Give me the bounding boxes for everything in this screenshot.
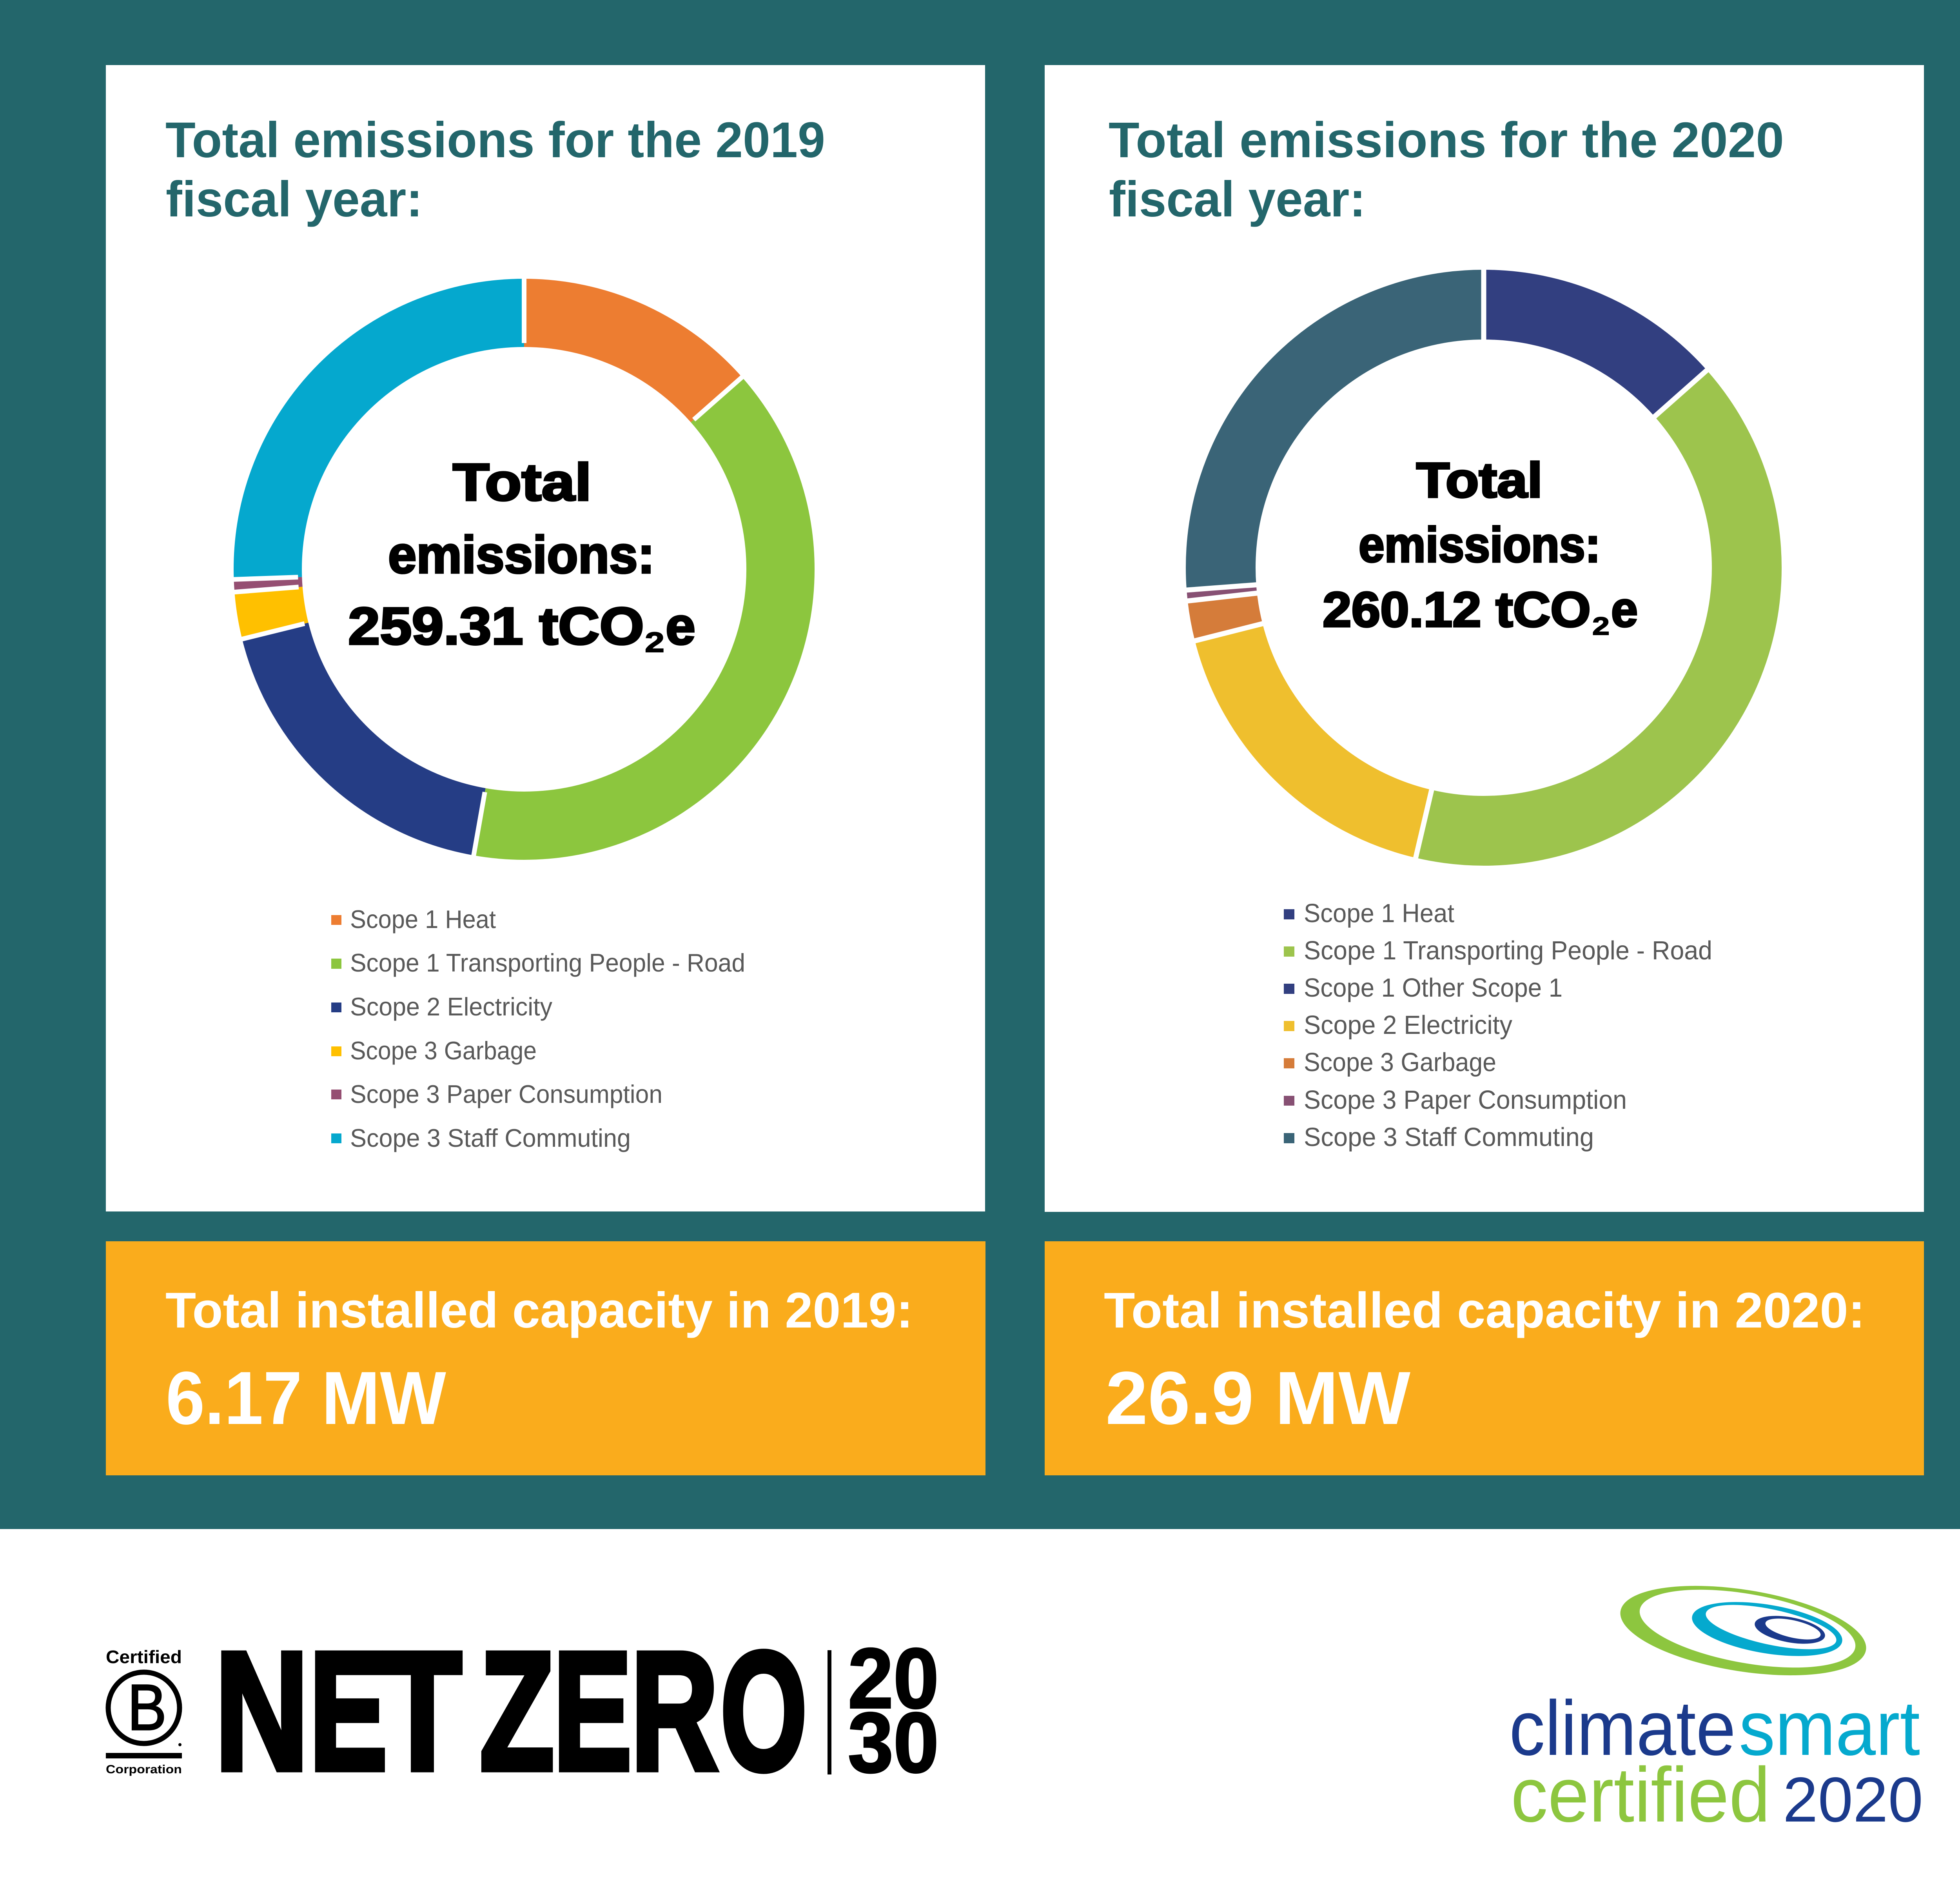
legend: 2019: Scope 3 Paper Consumption: [350, 1080, 662, 1108]
legend: 2020: Scope 2 Electricity: [1304, 1010, 1512, 1040]
heading: 2019 emissions: Total emissions for the 2019: [165, 112, 825, 168]
wordmark: NET ZERO: T: [383, 1617, 462, 1805]
callout: 2020 installed capacity: 26.9 MW: [1105, 1356, 1411, 1440]
legend: 2019: Scope 3 Staff Commuting: [350, 1124, 631, 1152]
logo: climatesmart certified 2020 wordmark: climate: [1509, 1685, 1736, 1771]
donut centre label: 2020 total: emissions:: [1359, 517, 1601, 572]
legend: 2019: Scope 1 Heat: [350, 905, 496, 934]
donut centre label: 2020 total: e: [1611, 582, 1638, 637]
wordmark: NET ZERO: O: [720, 1617, 807, 1805]
panel: 2020 emissions: [1045, 65, 1924, 1212]
legend: 2020: [1284, 899, 1712, 1152]
legend: 2020: Scope 3 Paper Consumption: [1304, 1085, 1627, 1115]
donut centre label: 2019 total: 259.31 tCO: [348, 597, 644, 656]
logo: climatesmart certified 2020 wordmark: certified: [1511, 1751, 1770, 1838]
wordmark: NET ZERO: Z: [480, 1616, 554, 1805]
donut centre label: 2020 total: [1323, 452, 1638, 640]
callout: 2020 installed capacity: Total installed capacity in 2020:: [1104, 1282, 1865, 1339]
donut centre label: 2019 total: [348, 453, 695, 658]
wordmark: NET ZERO: E: [309, 1617, 387, 1805]
wordmark: NET ZERO: N: [215, 1617, 309, 1805]
wordmark: NET ZERO: R: [631, 1617, 719, 1805]
legend: 2019: Scope 1 Transporting People - Road: [350, 948, 745, 977]
legend: 2020: Scope 1 Other Scope 1: [1304, 973, 1563, 1003]
heading: 2020 emissions: fiscal year:: [1109, 171, 1366, 227]
donut centre label: 2019 total: emissions:: [388, 526, 655, 584]
panel: 2019 emissions: [106, 65, 985, 1211]
logo: Certified B Corporation: B: [127, 1671, 167, 1744]
legend: 2020: Scope 1 Heat: [1304, 899, 1454, 928]
donut centre label: 2020 total: 260.12 tCO: [1323, 582, 1591, 637]
logo: Certified B Corporation: Corporation: [106, 1762, 182, 1776]
legend: 2019: [331, 905, 745, 1152]
donut chart: 2020 emissions: [1183, 266, 1747, 862]
year: 2030: 20: [848, 1631, 939, 1726]
callout: 2019 installed capacity: [106, 1241, 985, 1475]
logo: climatesmart certified 2020 wordmark: 2020: [1783, 1764, 1923, 1835]
legend: 2020: Scope 1 Transporting People - Road: [1304, 936, 1712, 965]
logo: NET ZERO 2030: [215, 1616, 939, 1805]
donut centre label: 2019 total: e: [666, 597, 695, 656]
heading: 2019 emissions: fiscal year:: [166, 171, 423, 227]
legend: 2019: Scope 2 Electricity: [350, 992, 552, 1021]
heading: 2019 emissions: [165, 112, 825, 227]
donut chart: 2019 emissions: [229, 274, 780, 860]
callout: 2019 installed capacity: 6.17 MW: [166, 1356, 446, 1440]
logo: Certified B Corporation: Certified: [106, 1647, 182, 1667]
logo: climatesmart swirl: [1614, 1571, 1872, 1690]
legend: 2020: Scope 3 Garbage: [1304, 1048, 1496, 1077]
legend: 2019: Scope 3 Garbage: [350, 1036, 537, 1065]
wordmark: NET ZERO: [215, 1616, 807, 1805]
heading: 2020 emissions: Total emissions for the 2020: [1109, 112, 1784, 168]
donut centre label: 2019 total: Total: [453, 453, 592, 512]
year: 2030: 30: [848, 1695, 939, 1791]
donut centre label: 2020 total: 2: [1592, 612, 1610, 640]
logo: climatesmart certified 2020 wordmark: smart: [1739, 1685, 1920, 1771]
wordmark: NET ZERO: E: [553, 1617, 632, 1805]
heading: 2020 emissions: [1109, 112, 1784, 227]
legend: 2020: Scope 3 Staff Commuting: [1304, 1122, 1594, 1152]
donut centre label: 2020 total: Total: [1416, 452, 1543, 508]
year: 2030: [848, 1631, 939, 1791]
logo: Certified B Corporation: [106, 1647, 182, 1776]
callout: 2019 installed capacity: Total installed capacity in 2019:: [165, 1282, 913, 1339]
donut centre label: 2019 total: 2: [645, 627, 664, 658]
callout: 2020 installed capacity: [1045, 1241, 1924, 1475]
logo: climatesmart certified 2020 wordmark: [1509, 1685, 1923, 1838]
